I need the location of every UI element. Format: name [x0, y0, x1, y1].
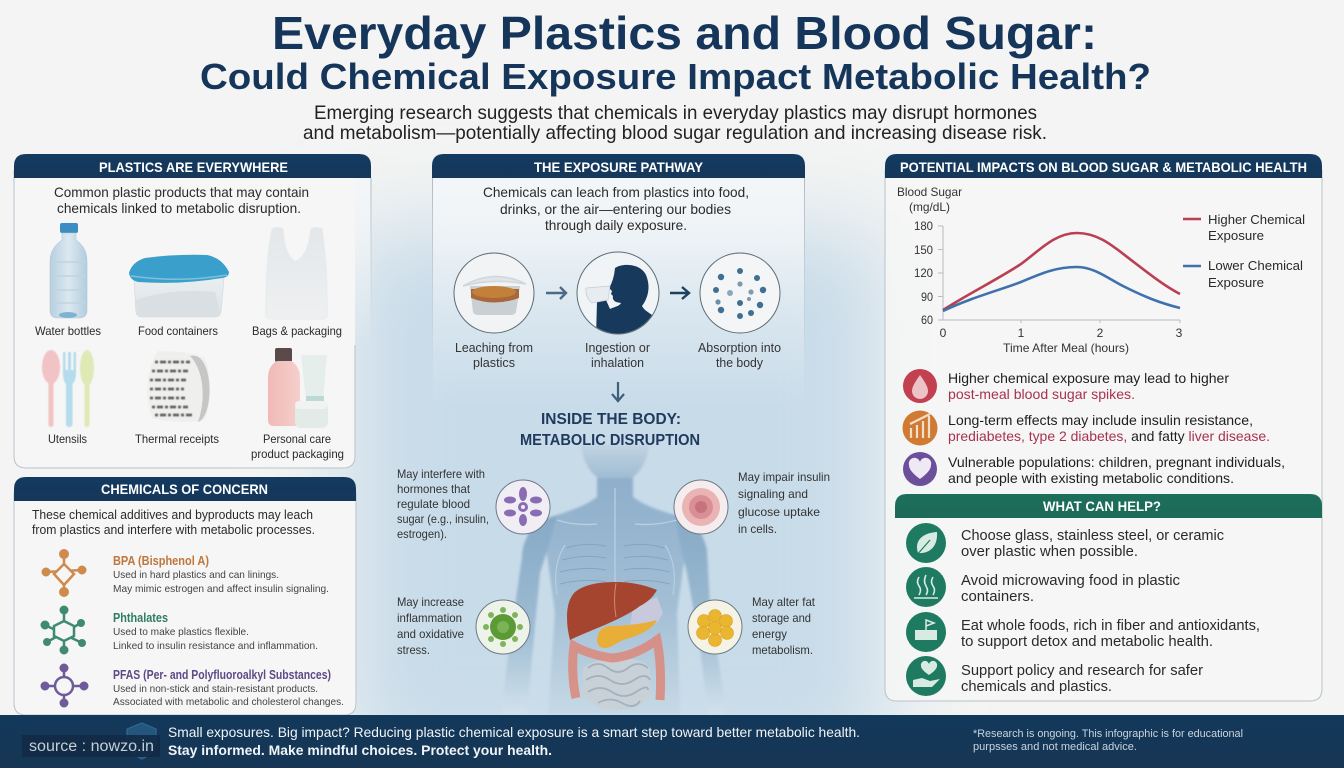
legend: [1183, 212, 1305, 290]
footer banner: [0, 715, 1344, 768]
heading: plastics are everywhere: PLASTICS ARE EVERYWHERE: [99, 159, 288, 175]
callout: fat storage: metabolism.: [752, 643, 813, 657]
subtitle: and metabolism—potentially affecting blood sugar regulation and increasing disease risk.: [303, 122, 1047, 144]
icon: personal care products: [268, 348, 328, 428]
line chart: blood sugar over time: 3: [1176, 326, 1183, 340]
panel: plastics are everywhere: [14, 154, 372, 468]
icon: whole foods: [906, 612, 946, 652]
callout: fat storage: [752, 595, 816, 657]
caption: water bottles: Water bottles: [35, 324, 101, 338]
series: higher chemical exposure: [943, 233, 1180, 310]
intro text: plastics: chemicals linked to metabolic disruption.: [57, 200, 301, 216]
heading: inside the body: INSIDE THE BODY:: [541, 411, 681, 428]
footnote: *Research is ongoing. This infographic is for educational: [973, 728, 1243, 740]
heading: chemicals of concern: [14, 477, 356, 501]
line chart: blood sugar over time: [897, 185, 1183, 355]
arrow: [670, 287, 689, 299]
intro text: chemicals: from plastics and interfere with metabolic processes.: [32, 522, 315, 537]
callout: hormones: regulate blood: [397, 497, 470, 511]
finding: vulnerable populations: and people with existing metabolic conditions.: [948, 470, 1234, 486]
line chart: blood sugar over time: Blood Sugar: [897, 185, 962, 199]
label: absorption into the body: Absorption into: [698, 341, 781, 355]
title: Everyday Plastics and Blood Sugar:: [272, 7, 1097, 59]
organ: liver: [567, 582, 657, 640]
heading: the exposure pathway: THE EXPOSURE PATHWAY: [534, 159, 704, 175]
callout: inflammation: and oxidative: [397, 627, 464, 641]
organ: large intestine: [573, 640, 661, 700]
caption: personal care product packaging: product packaging: [251, 447, 344, 461]
chemical: PFAS: Used in non-stick and stain-resistant products.: [113, 683, 318, 695]
callout: insulin signaling: glucose uptake: [738, 505, 820, 519]
label: leaching from plastics: [455, 341, 533, 370]
icon: insulin cell: [674, 480, 728, 534]
label: ingestion or inhalation: Ingestion or: [585, 341, 650, 355]
icon: hormone cell: [496, 480, 550, 534]
panel: potential impacts: [885, 154, 1322, 701]
line chart: blood sugar over time: Time After Meal (hours): [1003, 341, 1129, 355]
caption: personal care product packaging: [251, 432, 344, 461]
legend: Exposure: [1208, 275, 1264, 290]
subtitle: [303, 102, 1047, 144]
intro text: pathway: Chemicals can leach from plastics into food,: [483, 184, 749, 200]
callout: inflammation: May increase: [397, 595, 464, 609]
callout: inflammation: [397, 595, 464, 657]
intro text: pathway: through daily exposure.: [545, 217, 687, 233]
callout: insulin signaling: May impair insulin: [738, 470, 830, 484]
icon: leaf: [906, 523, 946, 563]
label: ingestion or inhalation: inhalation: [591, 356, 644, 370]
line chart: blood sugar over time: 150: [914, 243, 933, 257]
label: leaching from plastics: plastics: [473, 356, 515, 370]
line chart: blood sugar over time: 0: [940, 326, 947, 340]
finding: vulnerable populations: Vulnerable populations: children, pregnant individuals,: [948, 454, 1285, 470]
callout: hormones: hormones that: [397, 482, 471, 496]
icon: BPA molecule: [42, 550, 86, 596]
organ: stomach: [630, 597, 663, 627]
intro text: chemicals: These chemical additives and byproducts may leach: [32, 507, 313, 522]
callout: insulin signaling: [738, 470, 830, 536]
title: Could Chemical Exposure Impact Metabolic Health?: [200, 56, 1151, 97]
icon: heat waves: [906, 567, 946, 607]
chemical: phthalates: Linked to insulin resistance and inflammation.: [113, 640, 318, 652]
icon: shield: [127, 723, 156, 759]
callout: insulin signaling: signaling and: [738, 487, 808, 501]
chemical: phthalates: Phthalates: [113, 611, 168, 625]
line chart: blood sugar over time: 180: [914, 219, 933, 233]
icon: inflammation cell: [476, 600, 530, 654]
tip: support policy: chemicals and plastics.: [961, 679, 1112, 695]
tip: avoid microwaving: containers.: [961, 589, 1034, 605]
icon: plastic bag: [266, 228, 327, 319]
icon: rising chart: [902, 410, 938, 446]
finding: post-meal spikes: [948, 370, 1229, 402]
callout: inflammation: stress.: [397, 643, 430, 657]
line chart: blood sugar over time: 60: [921, 313, 933, 327]
callout: fat storage: May alter fat: [752, 595, 816, 609]
illustration: human body with organs: [502, 445, 726, 715]
icon: absorption dots: [700, 253, 780, 333]
heading: inside the body: [520, 411, 700, 449]
icon: fat cells: [688, 600, 742, 654]
legend: Lower Chemical: [1208, 258, 1303, 273]
icon: PFAS molecule: [41, 664, 88, 707]
tip: choose glass: Choose glass, stainless steel, or ceramic: [961, 528, 1224, 544]
intro text: plastics: Common plastic products that may contain: [54, 184, 309, 200]
line chart: blood sugar over time: 1: [1018, 326, 1025, 340]
heading: what can help: WHAT CAN HELP?: [1043, 498, 1161, 514]
footer message: Stay informed. Make mindful choices. Protect your health.: [168, 742, 552, 758]
tip: choose glass: [961, 528, 1224, 560]
heading: plastics are everywhere: [14, 154, 371, 178]
line chart: blood sugar over time: 2: [1097, 326, 1104, 340]
intro text: pathway: [483, 184, 749, 233]
icon: thermal receipt roll: [147, 351, 210, 422]
legend: Higher Chemical: [1208, 212, 1305, 227]
icon: phthalate molecule: [41, 606, 86, 654]
tip: avoid microwaving: [961, 573, 1180, 605]
arrow: down: [612, 382, 624, 401]
legend: Exposure: [1208, 228, 1264, 243]
tip: whole foods: [961, 618, 1260, 650]
finding: vulnerable populations: [948, 454, 1285, 486]
callout: insulin signaling: in cells.: [738, 522, 777, 536]
title: [200, 7, 1151, 97]
line chart: blood sugar over time: 90: [921, 290, 933, 304]
panel: chemicals of concern: [14, 477, 356, 715]
caption: utensils: Utensils: [48, 432, 87, 446]
label: absorption into the body: [698, 341, 781, 370]
intro text: plastics: [54, 184, 309, 216]
intro text: pathway: drinks, or the air—entering our bodies: [500, 201, 731, 217]
footnote: [973, 728, 1243, 753]
intro text: chemicals: [32, 507, 315, 537]
arrow: [546, 287, 566, 299]
icon: blood drop: [903, 369, 937, 403]
finding: long-term effects: [948, 412, 1270, 444]
chemical: PFAS: Associated with metabolic and cholesterol changes.: [113, 696, 344, 708]
callout: hormones: sugar (e.g., insulin,: [397, 512, 489, 526]
icon: utensils: [42, 350, 94, 427]
organ: pancreas: [597, 620, 657, 648]
callout: hormones: estrogen).: [397, 527, 447, 541]
caption: food containers: Food containers: [138, 324, 218, 338]
chemical: BPA: [113, 554, 329, 595]
heading: potential impacts: [885, 154, 1322, 178]
tip: support policy: [961, 663, 1203, 695]
caption: personal care product packaging: Personal care: [263, 432, 331, 446]
callout: hormones: [397, 467, 489, 541]
callout: fat storage: energy: [752, 627, 787, 641]
tip: avoid microwaving: Avoid microwaving food in plastic: [961, 573, 1180, 589]
label: absorption into the body: the body: [716, 356, 764, 370]
tip: whole foods: to support detox and metabolic health.: [961, 634, 1213, 650]
label: ingestion or inhalation: [585, 341, 650, 370]
tip: whole foods: Eat whole foods, rich in fiber and antioxidants,: [961, 618, 1260, 634]
source label: source : nowzo.in: [29, 738, 154, 755]
callout: fat storage: storage and: [752, 611, 811, 625]
chemical: PFAS: [113, 668, 344, 708]
sub-panel: what can help: [895, 494, 1322, 696]
chemical: BPA: BPA (Bisphenol A): [113, 554, 209, 568]
label: leaching from plastics: Leaching from: [455, 341, 533, 355]
line chart: blood sugar over time: (mg/dL): [909, 200, 950, 214]
subtitle: Emerging research suggests that chemicals in everyday plastics may disrupt hormones: [314, 102, 1037, 124]
icon: ingestion or inhalation: [577, 252, 659, 338]
heading: potential impacts: POTENTIAL IMPACTS ON BLOOD SUGAR & METABOLIC HEALTH: [900, 159, 1307, 175]
footer message: [168, 724, 860, 758]
finding: post-meal spikes: post-meal blood sugar spikes.: [948, 386, 1135, 402]
footer message: Small exposures. Big impact? Reducing plastic chemical exposure is a smart step toward better metabolic health.: [168, 724, 860, 740]
callout: hormones: May interfere with: [397, 467, 485, 481]
line chart: blood sugar over time: 120: [914, 266, 933, 280]
icon: heart: [903, 452, 937, 486]
icon: hand with heart: [906, 656, 946, 696]
panel: exposure pathway: [432, 154, 805, 408]
callout: inflammation: inflammation: [397, 611, 462, 625]
tip: choose glass: over plastic when possible.: [961, 544, 1138, 560]
finding: long-term effects: prediabetes, type 2 diabetes, and fatty liver disease.: [948, 428, 1270, 444]
heading: the exposure pathway: [432, 154, 805, 178]
chemical: BPA: May mimic estrogen and affect insulin signaling.: [113, 583, 329, 595]
icon: water bottle: [50, 223, 87, 318]
icon: leaching from plastic container: [454, 253, 534, 333]
heading: inside the body: METABOLIC DISRUPTION: [520, 432, 700, 449]
tip: support policy: Support policy and research for safer: [961, 663, 1203, 679]
heading: what can help: [895, 494, 1322, 518]
heading: chemicals of concern: CHEMICALS OF CONCERN: [101, 481, 268, 497]
icon: food container: [129, 255, 229, 317]
footnote: purpsses and not medical advice.: [973, 741, 1137, 753]
chemical: phthalates: [113, 611, 318, 652]
source label: [22, 735, 160, 757]
finding: post-meal spikes: Higher chemical exposure may lead to higher: [948, 370, 1229, 386]
chemical: BPA: Used in hard plastics and can linings.: [113, 569, 279, 581]
chemical: PFAS: PFAS (Per- and Polyfluoroalkyl Substances): [113, 668, 331, 682]
caption: thermal receipts: Thermal receipts: [135, 432, 219, 446]
caption: bags and packaging: Bags & packaging: [252, 324, 342, 338]
series: lower chemical exposure: [943, 267, 1180, 311]
finding: long-term effects: Long-term effects may include insulin resistance,: [948, 412, 1253, 428]
organ: small intestine: [583, 659, 650, 710]
chemical: phthalates: Used to make plastics flexible.: [113, 626, 249, 638]
